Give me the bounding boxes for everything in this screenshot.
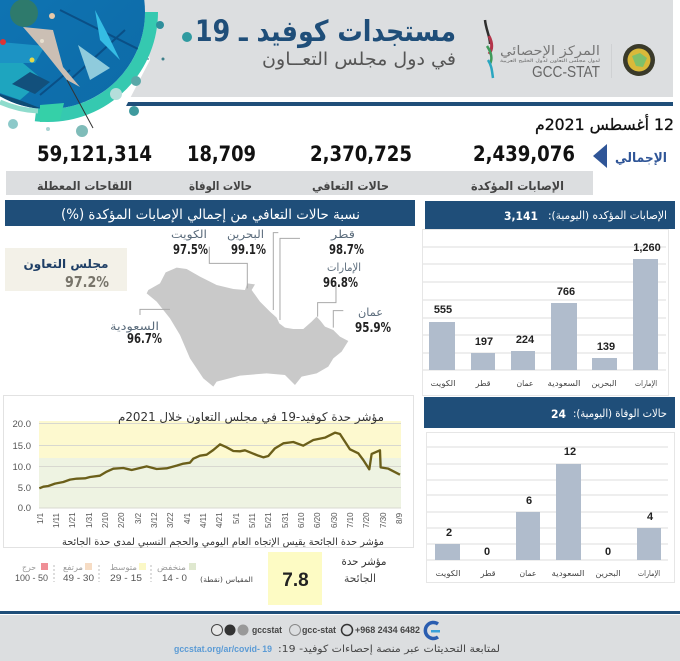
country labels: قطر (474, 379, 491, 388)
stat: vaccines: 59,121,314 (37, 142, 152, 166)
values: 224 (516, 334, 535, 346)
values: 4 (647, 511, 654, 523)
scale: medium: 29 - 15 (110, 573, 142, 584)
country labels (430, 379, 657, 389)
footer link (174, 644, 500, 655)
values: 12 (564, 446, 576, 458)
label: UAE: 96.8% (323, 276, 358, 291)
x axis dates: 5/1 (232, 512, 241, 524)
score label: مؤشر حدة (342, 555, 387, 568)
x axis dates: 2/10 (101, 512, 110, 528)
panel: recovery rate map: نسبة حالات التعافي من إجمالي الإصابات المؤكدة (%) (61, 207, 360, 223)
x axis dates: 7/30 (379, 512, 388, 528)
panel heading (424, 397, 675, 428)
y axis labels: 15.0 (12, 441, 31, 452)
country labels: قطر (479, 569, 496, 578)
y axis labels: 20.0 (12, 419, 31, 430)
label: UAE: الإمارات (327, 261, 361, 274)
stat: confirmed: الإصابات المؤكدة (471, 179, 564, 194)
country labels: الكويت (430, 379, 456, 388)
label: Qatar (329, 228, 364, 258)
label: Kuwait (171, 228, 208, 258)
country labels: السعودية (552, 569, 584, 578)
score box (268, 552, 322, 605)
x axis dates: 6/30 (330, 512, 339, 528)
score box: 7.8 (282, 570, 309, 591)
stat: recovered (310, 142, 412, 193)
total label: الإجمالي (615, 151, 667, 166)
x axis dates: 6/10 (297, 512, 306, 528)
values: 197 (475, 336, 493, 348)
map of Gulf region (147, 268, 348, 387)
scale: high: 49 - 30 (63, 573, 94, 584)
panel heading (5, 200, 415, 226)
x axis dates: 4/11 (199, 512, 208, 528)
country labels: عمان (520, 569, 536, 578)
GCC total box: مجلس التعاون (24, 257, 109, 272)
footer link: gccstat.org/ar/covid- 19 (174, 644, 272, 654)
stat: vaccines: اللقاحات المعطلة (37, 179, 132, 193)
country labels: الكويت (436, 569, 460, 578)
scale: high: مرتفع (63, 563, 83, 572)
panel heading: 3,141 (504, 209, 538, 223)
panel heading: 24 (551, 407, 566, 421)
label: Bahrain (227, 228, 266, 258)
scale: medium: متوسط (110, 563, 137, 572)
bars (435, 464, 661, 560)
x axis dates: 1/31 (85, 512, 94, 528)
label: UAE (323, 261, 361, 291)
social icons and handles (212, 622, 440, 638)
leader lines (140, 233, 343, 328)
x axis dates: 6/20 (313, 512, 322, 528)
values: 766 (557, 286, 575, 298)
x axis dates: 1/1 (36, 512, 45, 524)
footer (0, 611, 680, 661)
chart note: مؤشر حدة الجائحة يقيس الإتجاه العام اليومي والحجم النسبي لمدى حدة الجائحة (62, 537, 384, 548)
values (434, 242, 661, 353)
country labels: البحرين (592, 379, 616, 388)
header band (0, 0, 673, 106)
date: 12 أغسطس 2021م (535, 114, 674, 135)
scale: critical: حرج (22, 563, 36, 572)
country labels: عمان (516, 379, 534, 388)
GCC total box: 97.2% (65, 273, 109, 291)
stat: confirmed: 2,439,076 (473, 142, 575, 166)
x axis dates (36, 512, 404, 528)
country labels: الإمارات (638, 569, 660, 579)
label: Bahrain: البحرين (227, 228, 264, 241)
stat: vaccines (37, 142, 152, 193)
stat: recovered: حالات التعافي (312, 179, 389, 193)
logo: GCC-STAT: لدول مجلس التعاون لدول الخليج العربية (500, 59, 600, 64)
logo: GCC-STAT: GCC-STAT (532, 64, 600, 81)
scale: medium (110, 563, 146, 584)
x axis dates: 8/9 (395, 512, 404, 524)
values: 2 (446, 527, 452, 539)
x axis dates: 5/31 (281, 512, 290, 528)
values: 139 (597, 341, 615, 353)
label: Kuwait: 97.5% (173, 243, 208, 258)
panel: severity index line chart (4, 396, 414, 548)
x axis dates: 7/10 (346, 512, 355, 528)
x axis dates: 4/21 (215, 512, 224, 528)
scale title: المقياس (نقطة) (200, 576, 253, 584)
values: 6 (526, 495, 532, 507)
label: Bahrain: 99.1% (231, 243, 266, 258)
severity bands (39, 421, 401, 508)
title: مستجدات كوفيد ـ 19 (195, 14, 456, 48)
label: Saudi Arabia: 96.7% (127, 332, 162, 347)
stat: deaths: 18,709 (187, 142, 256, 166)
y axis labels: 0.0 (18, 503, 31, 514)
panel heading (425, 201, 675, 229)
panel: recovery rate map (5, 200, 415, 387)
subtitle: في دول مجلس التعــاون (262, 49, 456, 70)
severity line (39, 433, 400, 488)
scale: low: منخفض (157, 563, 186, 572)
y axis labels: 5.0 (18, 483, 31, 494)
stat: deaths (187, 142, 256, 194)
country labels (436, 569, 660, 579)
score label: الجائحة (344, 572, 376, 585)
x axis dates: 2/20 (117, 512, 126, 528)
x axis dates: 5/21 (264, 512, 273, 528)
label: Qatar: قطر (330, 228, 355, 241)
country labels: السعودية (548, 379, 580, 388)
logo: GCC-STAT (485, 20, 612, 81)
x axis dates: 3/12 (150, 512, 159, 528)
x axis dates: 3/2 (134, 512, 143, 524)
emblem: GCC seal (623, 44, 655, 76)
panel: daily deaths (424, 397, 675, 582)
x axis dates: 4/1 (183, 512, 192, 524)
GCC total box (5, 248, 127, 291)
label: Qatar: 98.7% (329, 243, 364, 258)
panel heading: الإصابات المؤكده (اليومية): (548, 209, 667, 222)
values (446, 446, 654, 558)
y axis labels: 10.0 (12, 462, 31, 473)
country labels: البحرين (596, 569, 620, 578)
logo: GCC-STAT: المركز الإحصائي (500, 44, 600, 59)
label: Kuwait: الكويت (171, 228, 207, 241)
bars (429, 259, 658, 370)
scale: low: 14 - 0 (162, 573, 187, 584)
x axis dates: 1/21 (68, 512, 77, 528)
label: Oman: عمان (358, 306, 383, 319)
panel: daily confirmed cases (422, 201, 675, 396)
scale: critical: 100 - 50 (15, 573, 48, 584)
y axis labels (12, 419, 31, 514)
x axis dates: 3/22 (166, 512, 175, 528)
scale: high (63, 563, 94, 584)
stat: recovered: 2,370,725 (310, 142, 412, 166)
values: 0 (605, 546, 611, 558)
social icons and handles: +968 2434 6482 (355, 625, 420, 635)
stat: deaths: حالات الوفاة (189, 179, 252, 194)
decorative circular illustration (0, 0, 192, 137)
x axis dates: 7/20 (362, 512, 371, 528)
scale: critical (15, 563, 48, 584)
label: Oman (355, 306, 391, 336)
x axis dates: 1/11 (52, 512, 61, 528)
values: 1,260 (633, 242, 661, 254)
values: 555 (434, 304, 452, 316)
social icons and handles: gcc-stat (302, 625, 336, 635)
values: 0 (484, 546, 490, 558)
panel: severity score and scale (15, 552, 387, 605)
country labels: الإمارات (635, 379, 657, 389)
label strip (6, 171, 593, 195)
panel heading: حالات الوفاة (اليومية): (573, 407, 667, 420)
label: Oman: 95.9% (355, 321, 391, 336)
social icons and handles: gccstat (252, 625, 282, 635)
footer link: لمتابعة التحديثات عبر منصة إحصاءات كوفيد- 19: (278, 644, 500, 655)
arrow (593, 144, 607, 168)
scale: low (157, 563, 196, 584)
x axis dates: 5/11 (248, 512, 257, 528)
score label (342, 555, 387, 585)
totals row (6, 142, 667, 195)
label: Saudi Arabia (110, 320, 162, 347)
chart title: مؤشر حدة كوفيد-19 في مجلس التعاون خلال 2021م (118, 410, 384, 425)
stat: confirmed (471, 142, 575, 194)
label: Saudi Arabia: السعودية (110, 320, 159, 333)
